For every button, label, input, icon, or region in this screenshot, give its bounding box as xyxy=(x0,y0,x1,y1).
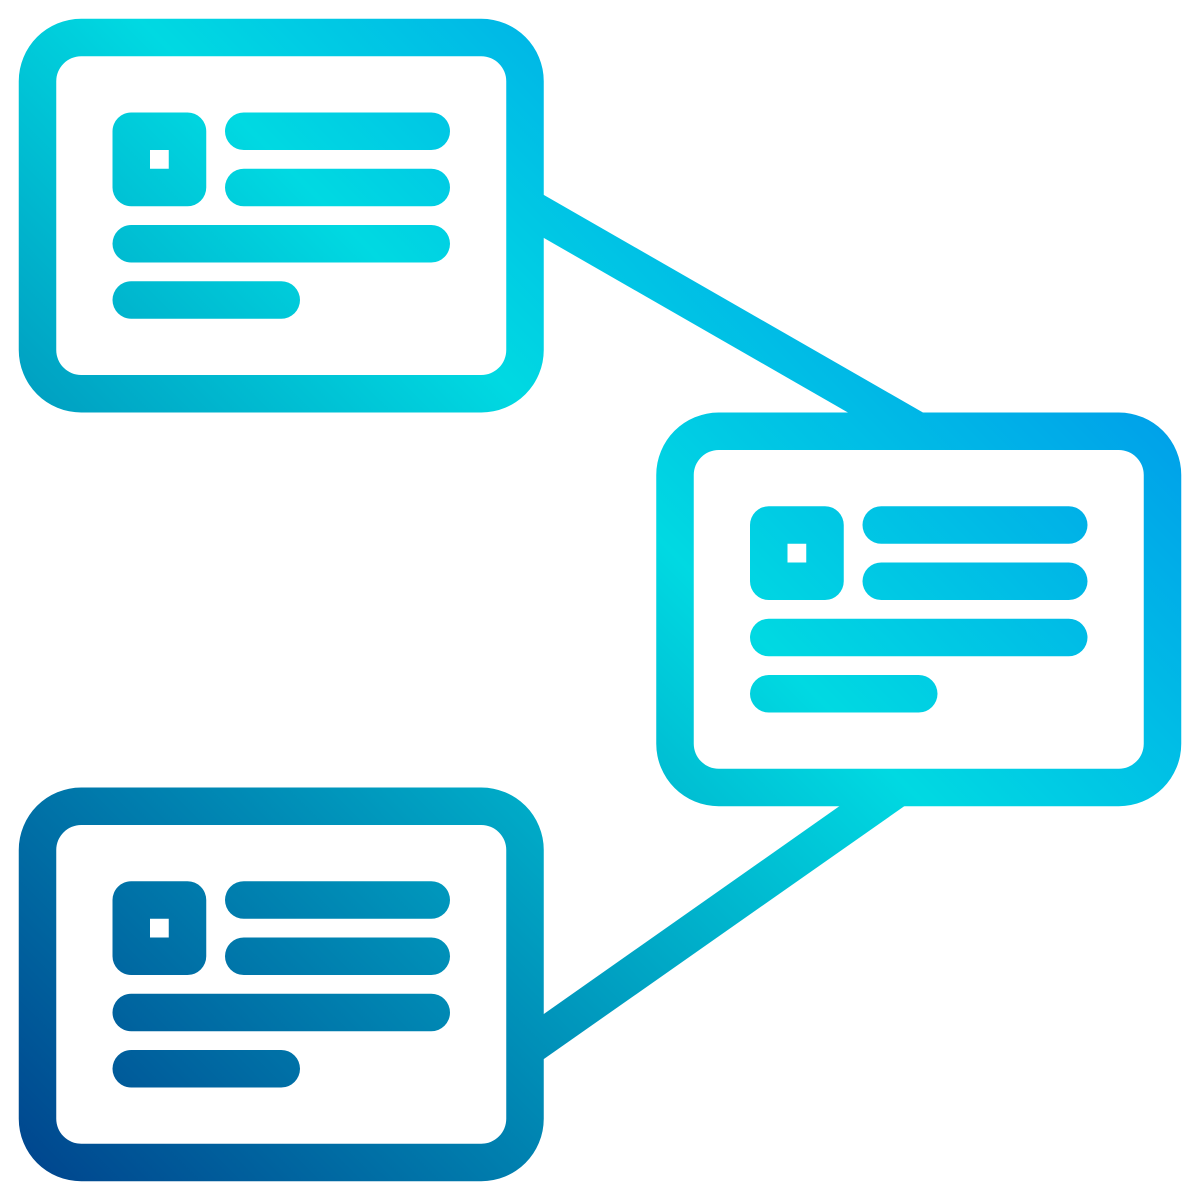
card outline xyxy=(19,788,544,1181)
text line 4 xyxy=(112,1050,300,1088)
arrow: connector from bottom card to middle card xyxy=(530,798,916,1069)
text line 1 xyxy=(862,506,1088,544)
text line 4 xyxy=(112,281,300,319)
panel: top-left card xyxy=(19,19,544,412)
panel: bottom-left card xyxy=(19,788,544,1181)
text line 3 xyxy=(112,994,450,1031)
icon: image placeholder xyxy=(112,881,206,975)
text line 1 xyxy=(225,881,450,919)
text line 1 xyxy=(225,112,450,150)
icon: image placeholder xyxy=(750,506,844,600)
text line 3 xyxy=(750,619,1088,656)
text line 4 xyxy=(750,675,938,712)
card outline xyxy=(656,412,1181,806)
text line 3 xyxy=(112,225,450,262)
icon: image placeholder xyxy=(112,112,206,206)
panel: middle-right card xyxy=(656,412,1181,806)
card outline xyxy=(19,19,544,412)
text line 2 xyxy=(225,169,450,206)
text line 2 xyxy=(225,938,450,975)
arrow: connector from top card to middle card xyxy=(530,187,936,420)
text line 2 xyxy=(862,562,1088,600)
